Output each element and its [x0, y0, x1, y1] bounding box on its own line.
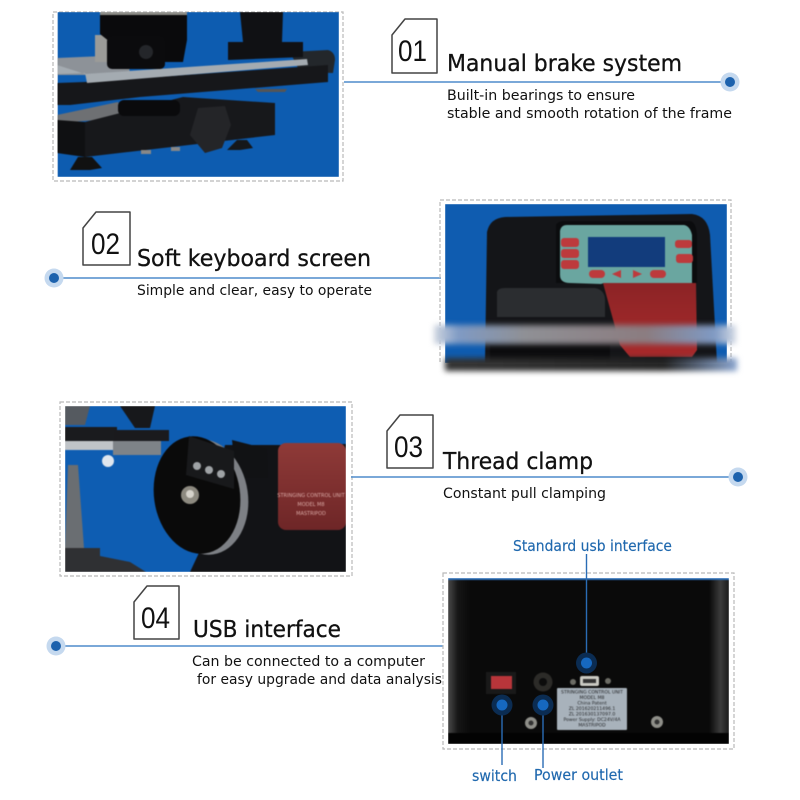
panel: thread clamp photo: MODEL M8 [297, 502, 325, 508]
panel: thread clamp photo: STRINGING CONTROL UNIT [277, 493, 346, 499]
callout: switch [472, 694, 517, 785]
panel: usb interface photo [443, 573, 734, 749]
text: manual brake description: stable and smooth rotation of the frame [447, 106, 732, 122]
text: manual brake description: Built-in bearings to ensure [447, 88, 635, 104]
number tag 02: 02 [91, 228, 120, 261]
panel: usb interface photo: ZL 201620211496.1 [569, 706, 615, 712]
heading: thread clamp: Thread clamp [442, 449, 593, 475]
panel: usb interface photo: MASTRIPOD [578, 722, 606, 728]
number tag 01: 01 [398, 35, 427, 68]
number tag 01 [392, 19, 437, 73]
text: usb description: for easy upgrade and data analysis [197, 672, 442, 688]
text: thread clamp description: Constant pull clamping [443, 486, 606, 502]
number tag 04 [134, 586, 179, 639]
blurred watermark band [434, 325, 737, 371]
number tag 02 [83, 212, 130, 265]
connector line 1 [344, 72, 740, 92]
text: keyboard description: Simple and clear, easy to operate [137, 283, 372, 299]
panel: keyboard screen photo [434, 200, 737, 371]
panel: usb interface photo: STRINGING CONTROL UNIT [561, 690, 623, 696]
panel: thread clamp photo: MASTRIPOD [296, 511, 326, 517]
connector line 3 [351, 468, 748, 486]
panel: usb interface photo: MODEL M8 [580, 695, 605, 701]
heading: manual brake system: Manual brake system [447, 51, 682, 77]
number tag 03: 03 [394, 431, 423, 464]
callout: power outlet: Power outlet [534, 766, 623, 784]
connector line 2 [44, 268, 441, 288]
callout: standard usb interface: Standard usb interface [513, 537, 672, 555]
panel: usb interface photo: Power Supply: DC24V/4A [563, 717, 621, 723]
callout: standard usb interface [513, 537, 672, 674]
panel: usb interface photo: ZL 201630137097.0 [569, 712, 615, 718]
number tag 03 [387, 415, 433, 468]
panel: thread clamp photo [60, 402, 352, 576]
connector line 4 [46, 636, 443, 656]
heading: soft keyboard screen: Soft keyboard screen [137, 246, 371, 272]
callout: power outlet [532, 694, 623, 784]
heading: usb interface: USB interface [193, 617, 341, 643]
callout: switch: switch [472, 767, 517, 785]
number tag 04: 04 [141, 602, 170, 635]
text: usb description: Can be connected to a computer [192, 654, 425, 670]
panel: usb interface photo: China Patent [577, 700, 607, 706]
panel: manual brake photo [53, 12, 343, 181]
